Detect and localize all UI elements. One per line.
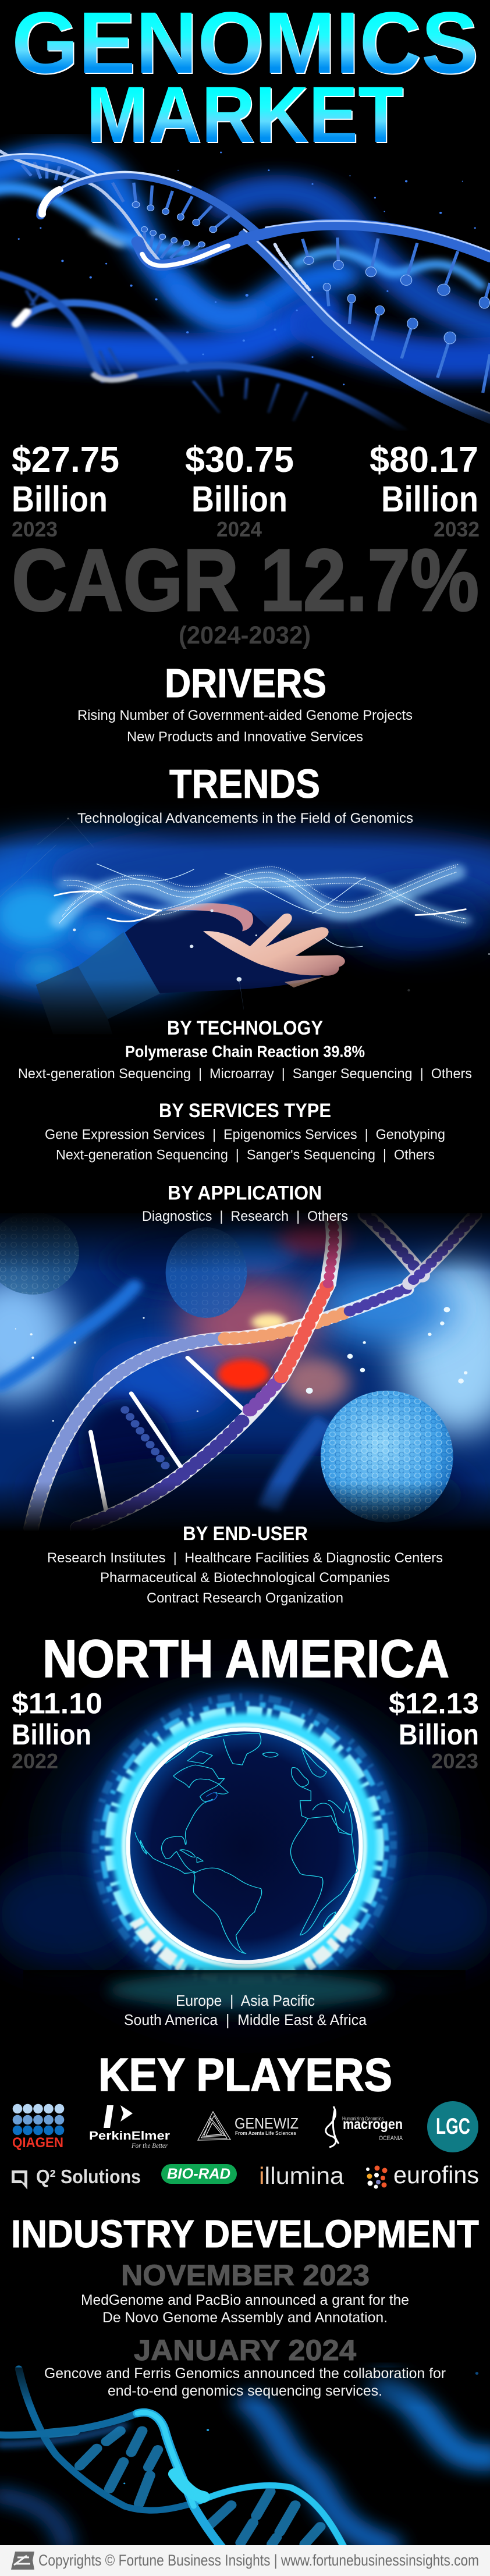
development: november 2023: [81, 2259, 409, 2326]
north america 2022 value: 2022: [12, 1749, 58, 1773]
stat 2032: 2032: [434, 517, 480, 541]
logo: perkinelmer: For the Better: [131, 2141, 168, 2149]
DNA strands: [31, 1215, 475, 1528]
cagr: (2024-2032): [179, 621, 311, 649]
logo: macrogen: OCEANIA: [379, 2135, 403, 2142]
particle DNA: [55, 864, 466, 947]
logo: genewiz: [198, 2112, 299, 2140]
development: january 2024: end-to-end genomics sequencing services.: [108, 2383, 382, 2399]
north america: [12, 1629, 479, 1773]
drivers: [77, 660, 413, 745]
blue cell: [321, 1391, 453, 1522]
bottom DNA image: [0, 2368, 490, 2549]
by application: [142, 1182, 348, 1224]
north america 2023 value: [389, 1687, 479, 1773]
logo: qiagen: QIAGEN: [12, 2135, 63, 2151]
by services type: BY SERVICES TYPE: [159, 1100, 331, 1122]
market size stats: [12, 440, 480, 541]
logo: bio-rad: [161, 2164, 237, 2184]
trends: [77, 761, 413, 826]
other regions: South America | Middle East & Africa: [124, 2011, 367, 2028]
sparkles: [17, 151, 476, 385]
DNA rungs: [47, 2431, 320, 2544]
by technology: [18, 1017, 472, 1082]
footer logo: [11, 2552, 34, 2570]
development: november 2023: MedGenome and PacBio announced a grant for the: [81, 2292, 409, 2308]
logo: macrogen: Humanizing Genomics: [342, 2116, 384, 2122]
by application: Diagnostics | Research | Others: [142, 1209, 348, 1224]
bokeh: [15, 1307, 467, 1422]
north america 2022 value: $11.10: [12, 1687, 102, 1720]
title: [12, 0, 480, 161]
by services type: Next-generation Sequencing | Sanger's Sequencing | Others: [56, 1147, 435, 1163]
stat 2032: Billion: [381, 479, 478, 520]
development: january 2024: JANUARY 2024: [134, 2334, 356, 2367]
globe image: [0, 1697, 490, 2007]
trends image: hand holding DNA: [0, 800, 490, 1043]
by technology: Next-generation Sequencing | Microarray | Sanger Sequencing | Others: [18, 1066, 472, 1082]
ground fade: [23, 1970, 466, 2003]
by end-user: Contract Research Organization: [147, 1590, 343, 1606]
logo: q2 solutions: Q² Solutions: [36, 2166, 141, 2187]
by technology: BY TECHNOLOGY: [167, 1017, 323, 1039]
by end-user: Research Institutes | Healthcare Facilities & Diagnostic Centers: [47, 1550, 443, 1566]
north america 2022 value: [12, 1687, 102, 1773]
logo: perkinelmer: [89, 2105, 170, 2149]
by end-user: Pharmaceutical & Biotechnological Companies: [100, 1570, 390, 1586]
drivers: Rising Number of Government-aided Genome Projects: [77, 708, 413, 723]
glowing ring: [95, 1697, 393, 1995]
stat 2024: $30.75: [185, 440, 294, 480]
stat 2023: Billion: [12, 479, 108, 520]
logo: perkinelmer: PerkinElmer: [89, 2130, 170, 2142]
logo: illumina: illumina: [259, 2162, 344, 2189]
key players: [12, 2049, 479, 2190]
by services type: Gene Expression Services | Epigenomics Services | Genotyping: [45, 1127, 445, 1143]
hero image: blue DNA helix: [0, 118, 490, 432]
by services type: [45, 1100, 445, 1163]
by application: BY APPLICATION: [168, 1182, 322, 1204]
logo: bio-rad: BIO-RAD: [167, 2166, 230, 2182]
north america 2023 value: Billion: [399, 1718, 479, 1751]
logo: macrogen: macrogen: [343, 2116, 403, 2133]
drivers: New Products and Innovative Services: [127, 729, 363, 745]
logo: lgc: [427, 2101, 478, 2152]
other regions: Europe | Asia Pacific: [176, 1992, 315, 2009]
north america 2022 value: Billion: [12, 1718, 91, 1751]
drivers: DRIVERS: [165, 660, 326, 706]
by end-user: [47, 1523, 443, 1606]
trends: Technological Advancements in the Field of Genomics: [77, 811, 413, 826]
floor reflection: [108, 1973, 387, 2007]
other regions: [124, 1992, 367, 2028]
logo: lgc: LGC: [436, 2114, 470, 2139]
stat 2023: $27.75: [12, 440, 119, 480]
by end-user: BY END-USER: [183, 1523, 308, 1545]
floating nodes: [67, 818, 490, 992]
industry development: [11, 2212, 479, 2399]
trends: TRENDS: [169, 761, 320, 806]
logo: genewiz: From Azenta Life Sciences: [235, 2130, 296, 2136]
development: january 2024: [44, 2334, 446, 2399]
logo: genewiz: GENEWIZ: [235, 2115, 299, 2132]
logo: eurofins: eurofins: [393, 2161, 479, 2188]
stat 2032: [370, 440, 480, 541]
development: january 2024: Gencove and Ferris Genomics announced the collaboration for: [44, 2365, 446, 2382]
logo: qiagen: [12, 2104, 64, 2151]
development: november 2023: De Novo Genome Assembly and Annotation.: [102, 2309, 388, 2326]
DNA backbones: [0, 151, 490, 419]
continents: [135, 1733, 358, 1953]
north america 2023 value: $12.13: [389, 1687, 479, 1720]
key players: KEY PLAYERS: [98, 2049, 392, 2101]
background spheres: [0, 1212, 247, 1318]
stat 2023: [12, 440, 119, 541]
logo: macrogen: [326, 2106, 403, 2147]
warm glow: [181, 1220, 350, 1407]
hand: [166, 903, 345, 987]
by technology: Polymerase Chain Reaction 39.8%: [125, 1043, 365, 1060]
footer: [0, 2545, 490, 2576]
distant DNA strand: [0, 275, 403, 431]
title line: market: MARKET: [87, 72, 404, 161]
sleeve and cuff: [36, 911, 322, 1034]
title line: market: MARKET: [86, 70, 403, 159]
stat 2024: [185, 440, 294, 541]
stat 2024: 2024: [216, 517, 262, 541]
DNA backbones: [19, 2369, 344, 2547]
north america: NORTH AMERICA: [42, 1629, 449, 1689]
logo: q2 solutions: [12, 2166, 141, 2190]
development: november 2023: NOVEMBER 2023: [121, 2259, 370, 2291]
stat 2024: Billion: [191, 479, 287, 520]
DNA rungs: [22, 162, 490, 393]
application image: red and blue DNA with cell: [0, 1209, 490, 1547]
back strand: [0, 1287, 134, 1385]
stat 2032: $80.17: [370, 440, 478, 480]
north america 2023 value: 2023: [431, 1749, 478, 1773]
stat 2023: 2023: [12, 517, 58, 541]
